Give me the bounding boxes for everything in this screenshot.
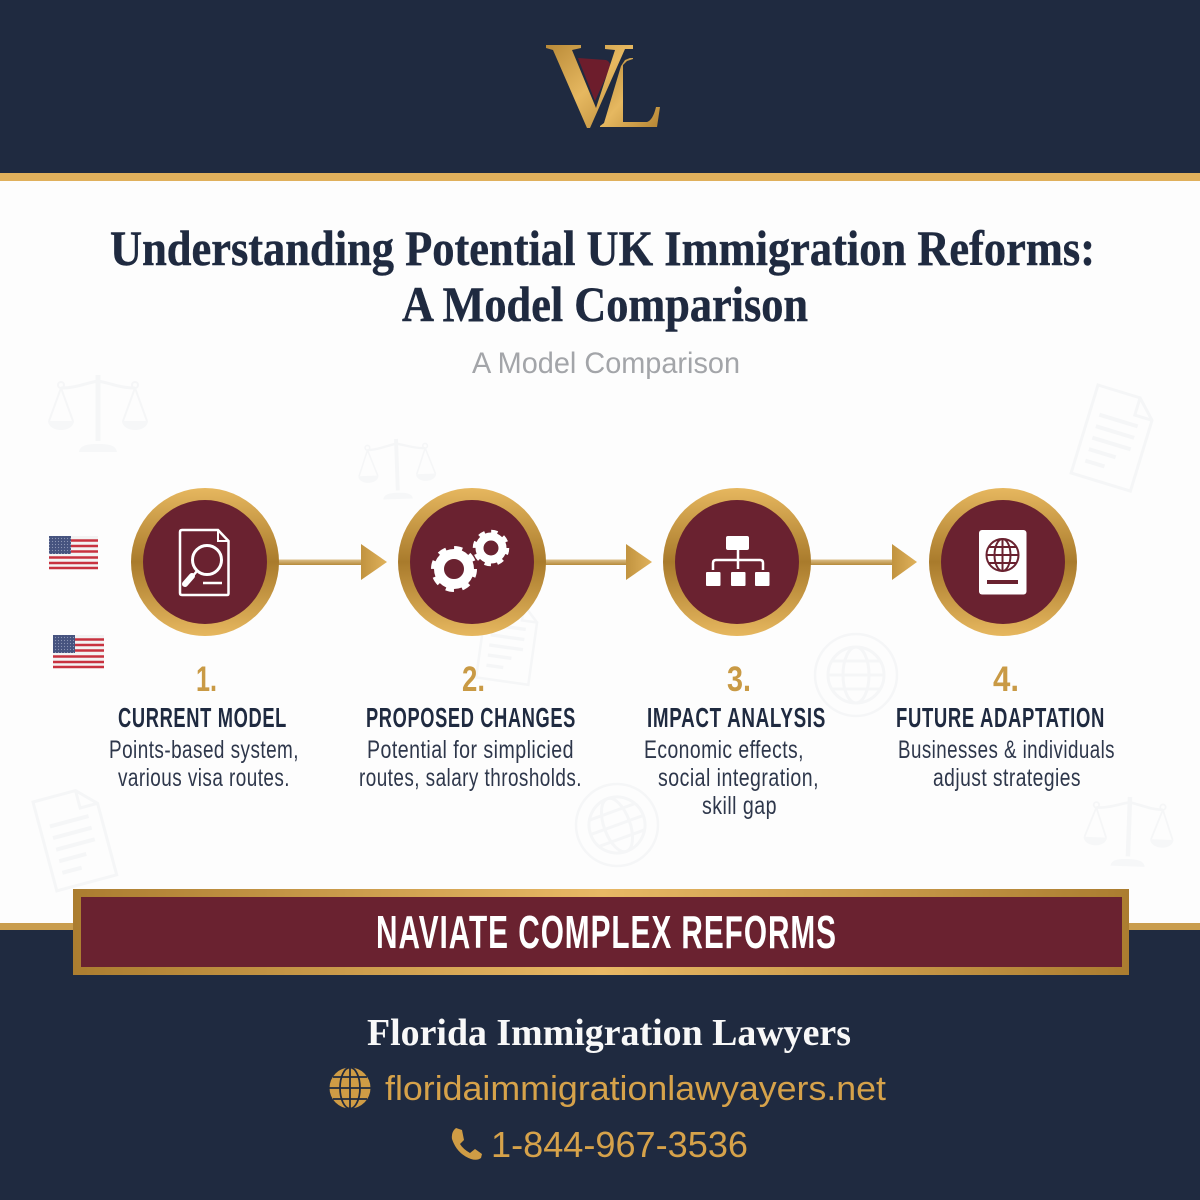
step 3 text: social integration, <box>658 764 819 792</box>
logo letter V <box>546 45 633 128</box>
step 4 text: 4. <box>993 660 1019 699</box>
step 4 text: Businesses & individuals <box>898 736 1115 764</box>
step 2 text: Potential for simplicied <box>367 736 574 764</box>
icon: globe <box>330 1068 370 1108</box>
arrow 1 <box>277 544 387 580</box>
header gold rule <box>0 173 1200 181</box>
background watermark icons <box>33 375 1175 891</box>
step 3 text: 3. <box>727 660 751 699</box>
step 2 text: routes, salary throsholds. <box>359 764 582 792</box>
step 1 text: various visa routes. <box>118 764 290 792</box>
step 4 text: adjust strategies <box>933 764 1081 792</box>
step 3 text: Economic effects, <box>644 736 804 764</box>
title: Understanding Potential UK Immigration Reforms: <box>110 220 1095 276</box>
step 2 text <box>359 660 582 792</box>
icon: US flag upper <box>49 536 98 569</box>
step 2 text: 2. <box>462 660 485 699</box>
arrow 2 <box>544 544 652 580</box>
step 3 text <box>644 660 826 820</box>
step 2 text: PROPOSED CHANGES <box>366 702 576 733</box>
firm name: Florida Immigration Lawyers <box>367 1012 851 1054</box>
step 3 text: IMPACT ANALYSIS <box>647 702 826 733</box>
phone number: 1-844-967-3536 <box>491 1124 748 1165</box>
logo: VL monogram <box>546 45 660 128</box>
call-to-action banner: NAVIATE COMPLEX REFORMS <box>376 906 837 958</box>
footer band <box>0 930 1200 1200</box>
step 3 text: skill gap <box>702 792 777 820</box>
logo letter L <box>600 58 660 127</box>
arrow 3 <box>809 544 917 580</box>
header band <box>0 0 1200 173</box>
step 1 text: CURRENT MODEL <box>118 702 287 733</box>
step 2 icon: gears <box>398 488 546 636</box>
title: A Model Comparison <box>402 276 808 332</box>
icon: US flag lower <box>53 635 104 668</box>
step 4 icon: passport <box>929 488 1077 636</box>
title <box>110 220 1095 332</box>
step 1 text: 1. <box>196 660 217 699</box>
call-to-action banner <box>73 889 1129 975</box>
footer gold rule <box>0 923 1200 930</box>
website: floridaimmigrationlawyayers.net <box>385 1070 887 1108</box>
logo maroon shield <box>578 58 610 101</box>
step 3 icon: hierarchy <box>663 488 811 636</box>
step 1 text: Points-based system, <box>109 736 299 764</box>
step 1 text <box>109 660 299 792</box>
step 4 text <box>896 660 1115 792</box>
icon: phone <box>452 1128 482 1160</box>
step 1 icon: document search <box>131 488 279 636</box>
subtitle: A Model Comparison <box>472 347 740 380</box>
